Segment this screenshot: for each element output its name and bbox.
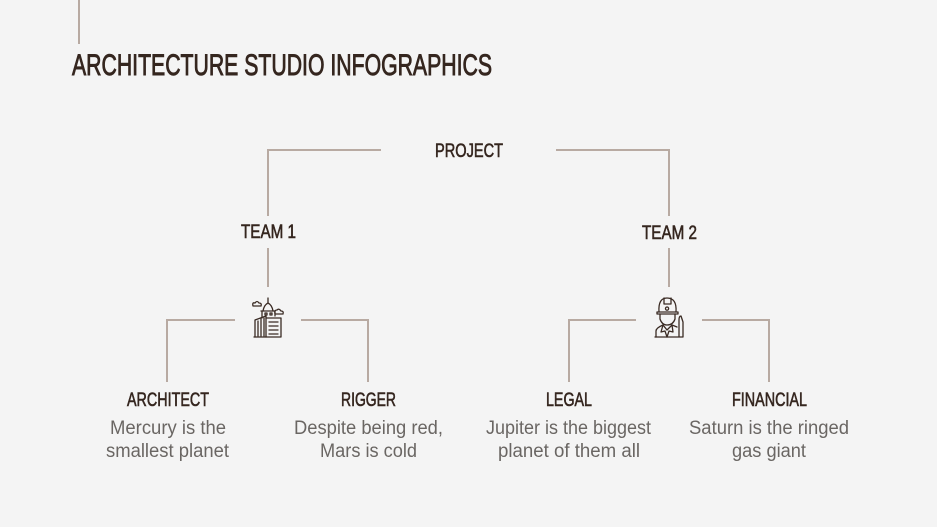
- connector: team 1 to icon: [267, 248, 269, 287]
- connector: team 1 to rigger: [301, 320, 368, 382]
- description: rigger: Despite being red,: [294, 418, 443, 439]
- description: architect: smallest planet: [106, 441, 230, 462]
- description: legal: planet of them all: [498, 441, 640, 462]
- heading: architect: ARCHITECT: [127, 390, 209, 411]
- heading: financial: FINANCIAL: [732, 390, 807, 411]
- description: financial: gas giant: [732, 441, 807, 462]
- connector: team 2 to icon: [668, 248, 670, 287]
- description: legal: Jupiter is the biggest: [486, 418, 652, 439]
- description: architect: Mercury is the: [110, 418, 226, 439]
- connector: team 2 to financial: [702, 320, 769, 382]
- connector: team 1 to architect: [167, 320, 235, 382]
- description: financial: Saturn is the ringed: [689, 418, 849, 439]
- heading: team 1: TEAM 1: [241, 222, 296, 243]
- connector: project to team 2: [556, 150, 669, 216]
- connector: team 2 to legal: [569, 320, 636, 382]
- heading: legal: LEGAL: [546, 390, 592, 411]
- heading: team 2: TEAM 2: [642, 223, 697, 244]
- connector: project to team 1: [268, 150, 381, 216]
- description: rigger: Mars is cold: [320, 441, 417, 462]
- role: rigger: [294, 390, 443, 462]
- icon: building: [253, 298, 283, 337]
- heading: project: PROJECT: [435, 141, 503, 162]
- role: financial: [689, 390, 849, 462]
- heading: rigger: RIGGER: [341, 390, 396, 411]
- role: architect: [106, 390, 230, 462]
- icon: construction worker: [655, 298, 683, 337]
- title: ARCHITECTURE STUDIO INFOGRAPHICS: [72, 49, 492, 82]
- role: legal: [486, 390, 652, 462]
